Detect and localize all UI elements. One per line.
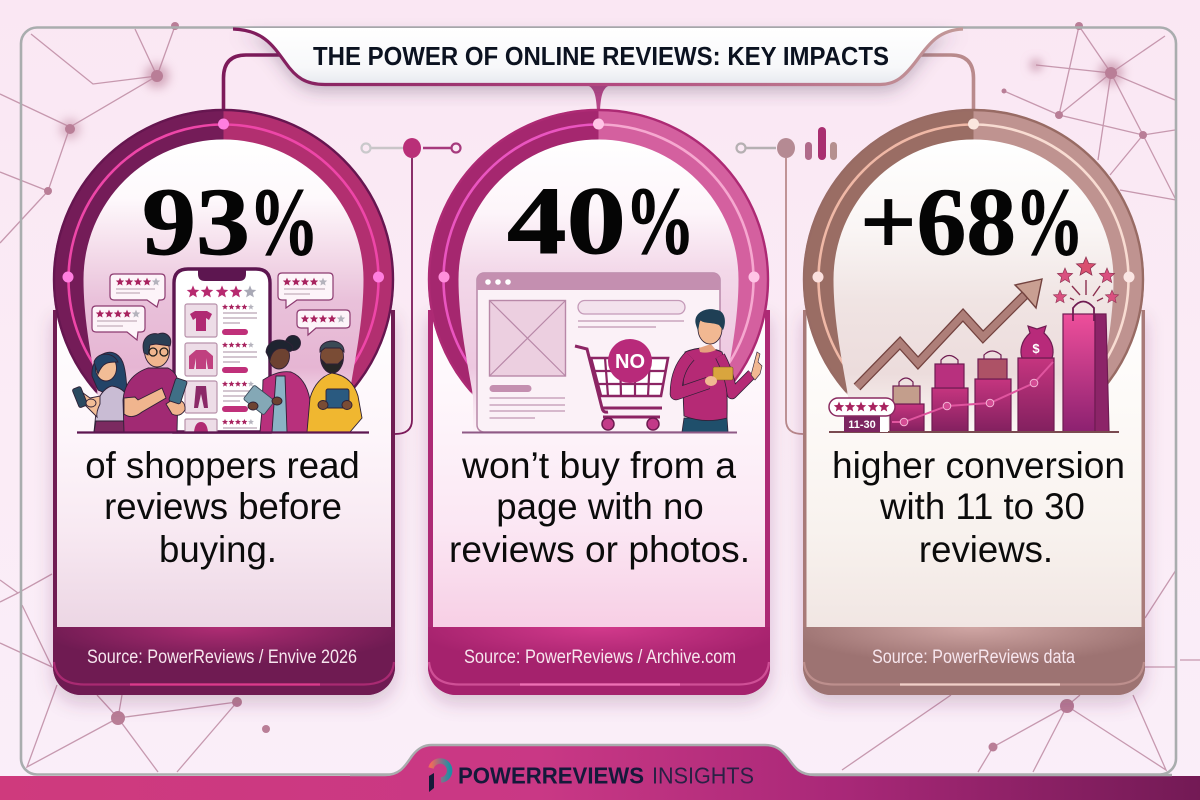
panel: 93% card xyxy=(53,110,395,695)
illustration: rising conversion chart with shopping bags xyxy=(829,257,1119,432)
source band xyxy=(53,627,395,695)
description xyxy=(449,445,750,570)
shopping cart with NO badge: NO xyxy=(615,351,645,373)
ring interior xyxy=(84,140,364,432)
ring xyxy=(52,108,394,395)
illustration: empty product page with cart and shopper xyxy=(462,273,762,432)
money bag: $ xyxy=(1032,341,1040,356)
statistic: % xyxy=(1015,168,1084,275)
description: won’t buy from a xyxy=(461,445,737,486)
description: buying. xyxy=(159,529,277,570)
source band xyxy=(428,627,770,695)
source band: Source: PowerReviews / Envive 2026 xyxy=(87,647,357,668)
description: reviews or photos. xyxy=(449,529,750,570)
shopper with credit card xyxy=(676,309,762,432)
person: woman with phone xyxy=(72,352,130,432)
money bag xyxy=(1021,326,1053,358)
description: reviews before xyxy=(104,486,342,527)
phone xyxy=(174,269,270,432)
statistic: % xyxy=(625,167,695,274)
ring xyxy=(802,108,1144,395)
source band: Source: PowerReviews / Archive.com xyxy=(464,647,736,668)
person: man with glasses xyxy=(123,333,187,432)
small node connector right with bars xyxy=(736,127,837,434)
statistic: +68 xyxy=(860,168,1016,275)
panel: 40% card xyxy=(428,110,770,695)
celebration stars xyxy=(1053,257,1119,303)
person: woman with tablet xyxy=(243,336,311,432)
large shopping bag xyxy=(1063,302,1109,432)
browser window xyxy=(477,273,720,432)
rating badge 11-30 xyxy=(829,398,895,432)
statistic: % xyxy=(249,168,319,275)
ring xyxy=(428,108,770,395)
description xyxy=(832,445,1125,570)
rating badge 11-30: 11-30 xyxy=(848,419,876,431)
description xyxy=(85,445,360,570)
review bubbles xyxy=(92,273,350,340)
description: of shoppers read xyxy=(85,445,360,486)
connectors between title and cards xyxy=(224,55,974,110)
footer wordmark: POWERREVIEWS xyxy=(458,762,644,788)
title text: THE POWER OF ONLINE REVIEWS: KEY IMPACTS xyxy=(313,41,889,71)
description: with 11 to 30 xyxy=(879,486,1085,527)
title banner xyxy=(233,28,963,84)
trend arrow xyxy=(857,279,1042,387)
description: page with no xyxy=(496,486,704,527)
growth columns xyxy=(890,351,1054,432)
shopping cart with NO badge xyxy=(575,339,668,430)
ring interior xyxy=(458,140,738,432)
small node connector left xyxy=(362,138,460,434)
statistic: 93 xyxy=(142,168,250,275)
footer bar xyxy=(0,745,1200,800)
panel: +68% card xyxy=(803,110,1145,695)
illustration: shoppers with phone and reviews xyxy=(72,269,369,432)
footer insights label: INSIGHTS xyxy=(652,762,754,788)
source band: Source: PowerReviews data xyxy=(872,647,1075,668)
ring interior xyxy=(834,140,1114,432)
description: reviews. xyxy=(919,529,1053,570)
description: higher conversion xyxy=(832,445,1125,486)
conversion line xyxy=(892,362,1053,426)
source band xyxy=(803,627,1145,695)
person: man in yellow sweater xyxy=(307,341,362,432)
footer logo xyxy=(429,761,450,792)
statistic: 40 xyxy=(507,167,626,274)
